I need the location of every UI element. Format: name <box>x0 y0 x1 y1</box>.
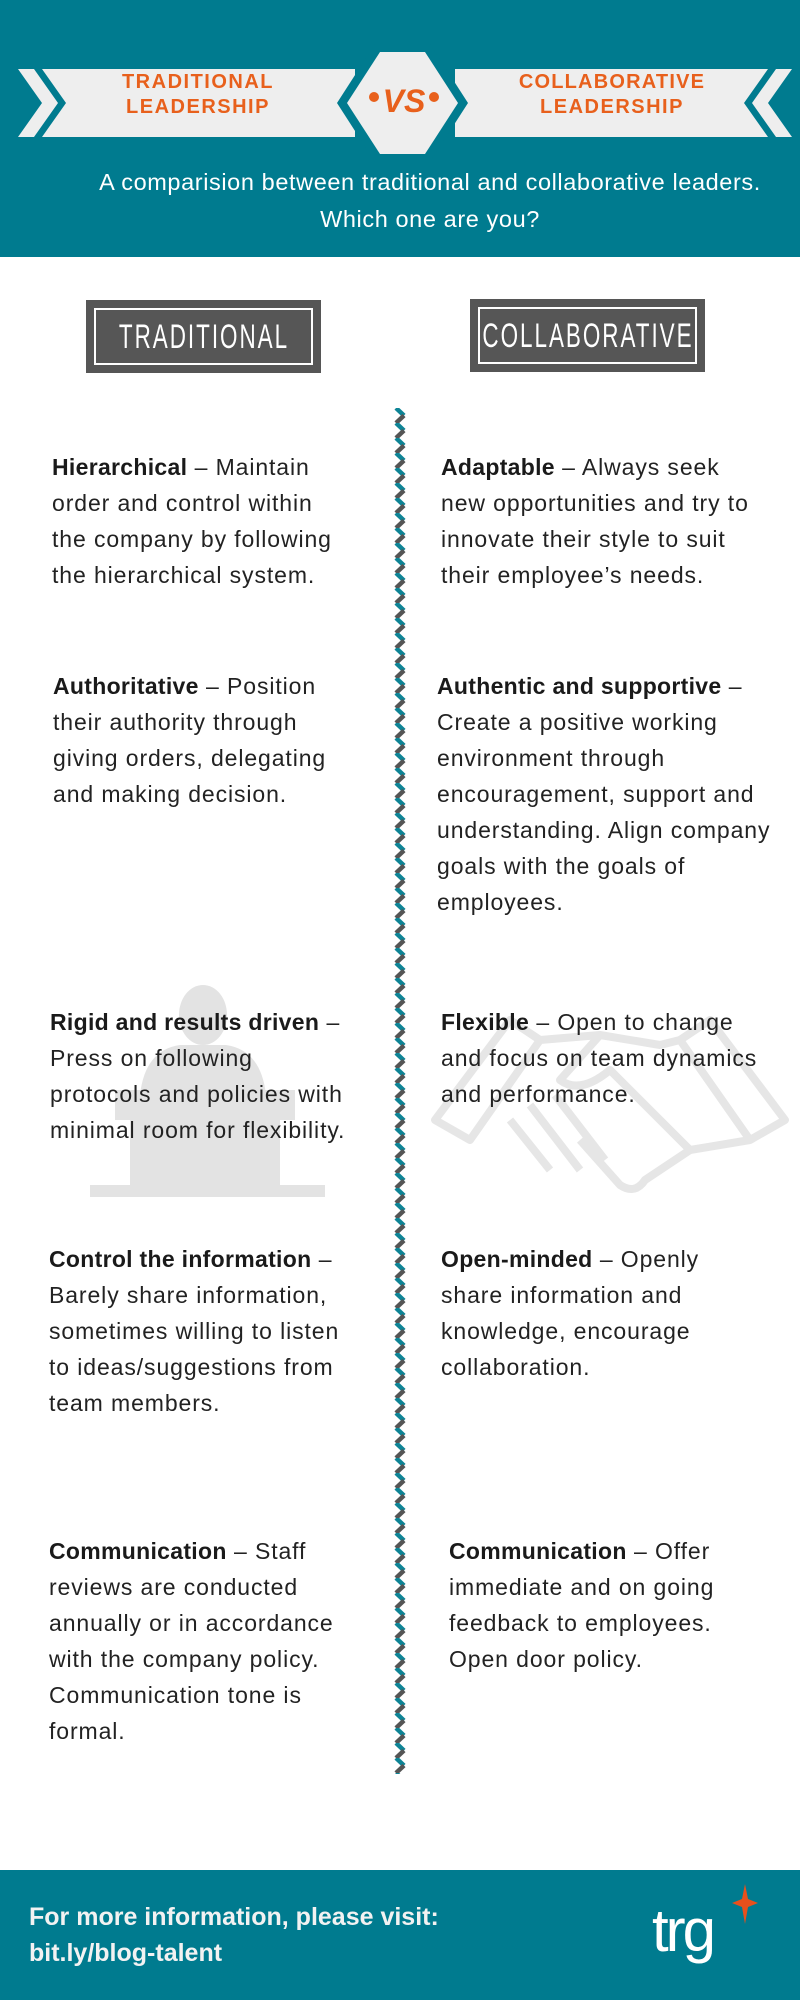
text: communication traditional: Communication – Staff <box>49 1538 306 1564</box>
text: hierarchical: the company by following <box>52 526 332 552</box>
heading: traditional: TRADITIONAL <box>118 318 289 356</box>
text: control the information: Control the information – <box>49 1246 332 1272</box>
text: flexible <box>441 1009 757 1107</box>
diamond <box>347 52 458 154</box>
text: authentic and supportive <box>437 673 770 915</box>
text: flexible: and focus on team dynamics <box>441 1045 757 1071</box>
text: authoritative <box>53 673 326 807</box>
text: rigid: minimal room for flexibility. <box>50 1117 345 1143</box>
text: hierarchical: Hierarchical – Maintain <box>52 454 310 480</box>
text: authentic and supportive: Authentic and supportive – <box>437 673 742 699</box>
text: rigid <box>50 1009 345 1143</box>
icon: handshake <box>431 1016 789 1193</box>
icon: person at podium <box>90 985 325 1197</box>
text: control the information: team members. <box>49 1390 220 1416</box>
text: communication traditional: Communication tone is <box>49 1682 302 1708</box>
text: rigid: Press on following <box>50 1045 253 1071</box>
text: rigid: protocols and policies with <box>50 1081 343 1107</box>
text: adaptable <box>441 454 749 588</box>
text: communication collaborative: immediate and on going <box>449 1574 714 1600</box>
text: adaptable: new opportunities and try to <box>441 490 749 516</box>
logo: trg: trg <box>652 1897 713 1964</box>
text: authoritative: Authoritative – Position <box>53 673 316 699</box>
text: control the information: to ideas/suggestions from <box>49 1354 334 1380</box>
footer text <box>29 1903 439 1967</box>
text: authentic and supportive: encouragement, support and <box>437 781 754 807</box>
diamond outline gap <box>337 44 468 162</box>
ribbon banner with vs diamond: LEADERSHIP <box>126 96 270 118</box>
text: open-minded <box>441 1246 699 1380</box>
text: authoritative: and making decision. <box>53 781 287 807</box>
right ribbon <box>455 69 768 137</box>
header band <box>0 0 800 257</box>
footer <box>0 1870 800 2000</box>
left chevron <box>18 69 58 137</box>
ribbon banner with vs diamond: LEADERSHIP <box>540 96 684 118</box>
footer text: bit.ly/blog-talent <box>29 1939 222 1967</box>
text: authoritative: giving orders, delegating <box>53 745 326 771</box>
text: adaptable: their employee’s needs. <box>441 562 704 588</box>
text: rigid: Rigid and results driven – <box>50 1009 340 1035</box>
text: open-minded: Open-minded – Openly <box>441 1246 699 1272</box>
text: authentic and supportive: understanding. Align company <box>437 817 770 843</box>
text: authentic and supportive: employees. <box>437 889 564 915</box>
logo: trg <box>652 1884 758 1964</box>
text: hierarchical <box>52 454 332 588</box>
text: open-minded: collaboration. <box>441 1354 590 1380</box>
subtitle <box>99 169 761 232</box>
ribbon banner with vs diamond: COLLABORATIVE <box>519 71 705 93</box>
text: open-minded: share information and <box>441 1282 682 1308</box>
text: open-minded: knowledge, encourage <box>441 1318 690 1344</box>
heading: traditional <box>86 300 321 373</box>
text: communication traditional: with the company policy. <box>49 1646 319 1672</box>
text: authentic and supportive: goals with the goals of <box>437 853 685 879</box>
footer text: For more information, please visit: <box>29 1903 439 1931</box>
text: communication collaborative: Communication – Offer <box>449 1538 710 1564</box>
text: communication collaborative <box>449 1538 714 1672</box>
heading: collaborative <box>470 299 705 372</box>
text: control the information: Barely share information, <box>49 1282 327 1308</box>
text: adaptable: Adaptable – Always seek <box>441 454 720 480</box>
text: authoritative: their authority through <box>53 709 297 735</box>
text: flexible: Flexible – Open to change <box>441 1009 734 1035</box>
ribbon banner with vs diamond: TRADITIONAL <box>122 71 274 93</box>
ribbon banner with vs diamond: VS <box>383 83 426 119</box>
text: adaptable: innovate their style to suit <box>441 526 726 552</box>
ribbon banner with vs diamond <box>18 52 792 154</box>
divider zigzag <box>394 408 406 1774</box>
text: communication traditional: reviews are conducted <box>49 1574 298 1600</box>
subtitle: A comparision between traditional and collaborative leaders. <box>99 169 761 195</box>
text: hierarchical: order and control within <box>52 490 313 516</box>
text: hierarchical: the hierarchical system. <box>52 562 315 588</box>
text: control the information: sometimes willing to listen <box>49 1318 339 1344</box>
text: authentic and supportive: Create a positive working <box>437 709 718 735</box>
subtitle: Which one are you? <box>320 206 540 232</box>
text: control the information <box>49 1246 339 1416</box>
text: communication collaborative: feedback to employees. <box>449 1610 712 1636</box>
text: communication collaborative: Open door policy. <box>449 1646 643 1672</box>
right chevron <box>752 69 792 137</box>
text: communication traditional: formal. <box>49 1718 126 1744</box>
text: authentic and supportive: environment through <box>437 745 665 771</box>
text: communication traditional: annually or in accordance <box>49 1610 334 1636</box>
heading: collaborative: COLLABORATIVE <box>482 316 693 354</box>
text: flexible: and performance. <box>441 1081 636 1107</box>
text: communication traditional <box>49 1538 334 1744</box>
left ribbon <box>42 69 355 137</box>
